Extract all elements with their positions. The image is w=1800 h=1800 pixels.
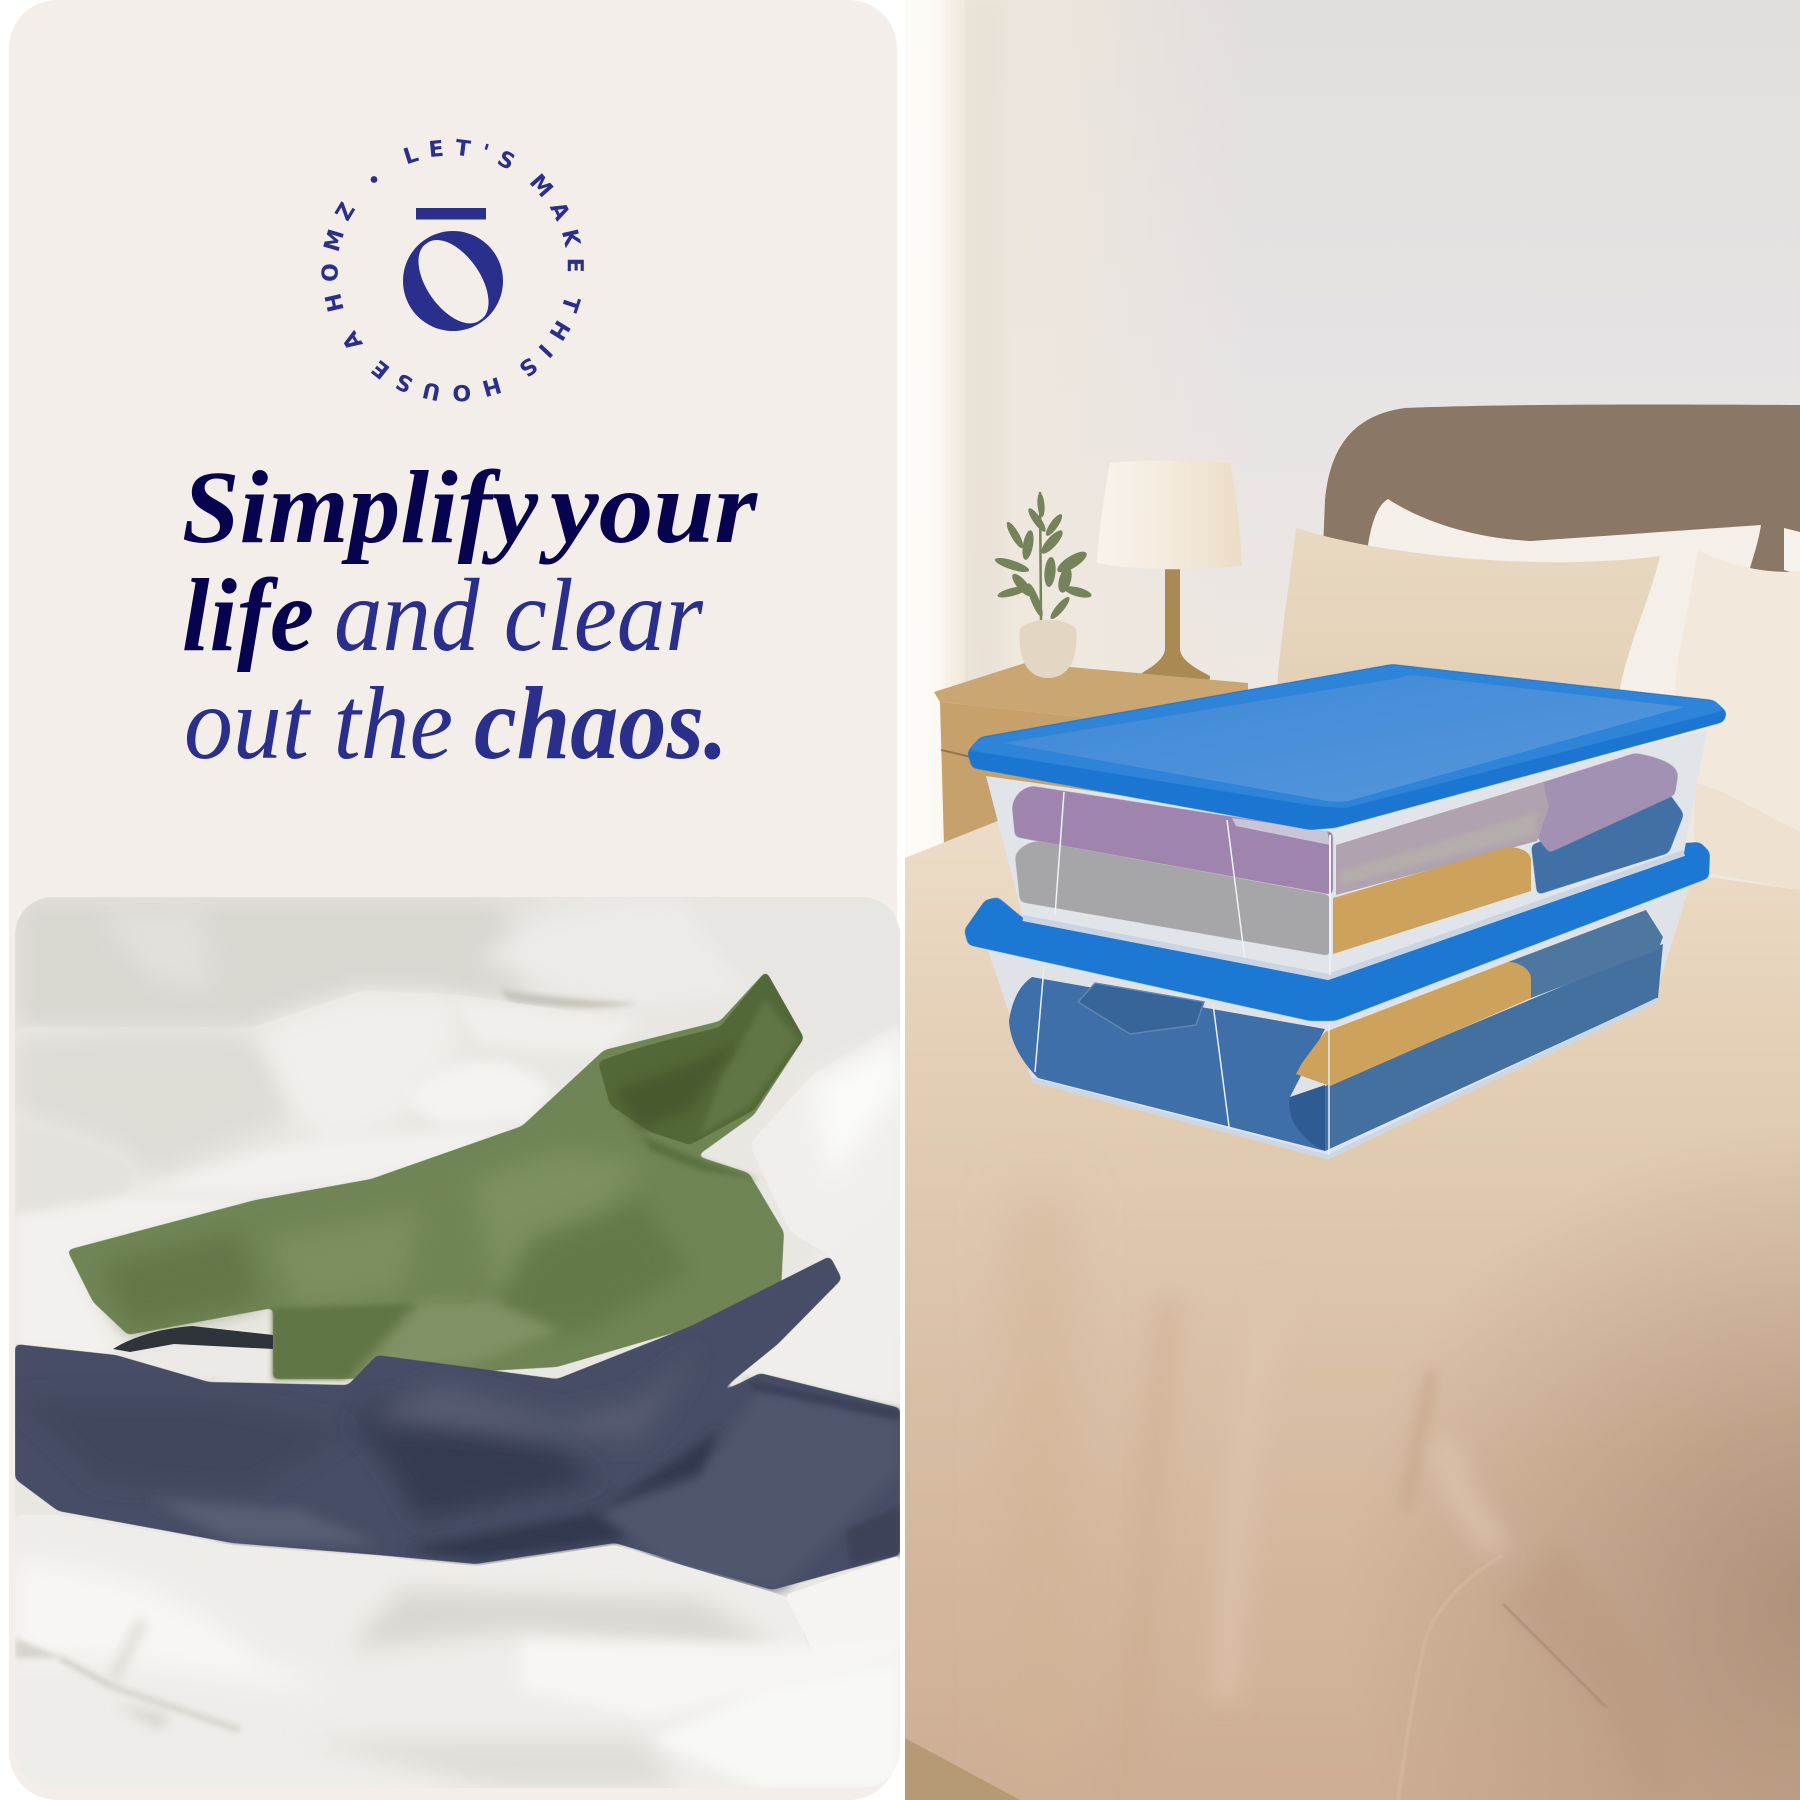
headline line 3: chaos. bbox=[474, 666, 728, 781]
far right white pillow edge bbox=[1784, 528, 1800, 575]
lamp bbox=[1097, 461, 1242, 688]
navy trousers bbox=[15, 1256, 900, 1590]
white duvet foreground bbox=[15, 1515, 900, 1788]
photo: messy bed with clothes bbox=[15, 897, 900, 1788]
potted plant bbox=[993, 492, 1093, 678]
front beige pillow bbox=[1276, 528, 1660, 700]
upper box body bbox=[986, 730, 1707, 977]
headline line 2: life bbox=[182, 558, 314, 673]
upper box yellow sweater bbox=[1333, 847, 1531, 954]
upper box purple sweater bbox=[1012, 786, 1333, 895]
bedroom wall bbox=[1038, 0, 1800, 890]
upper box light mauve sweater bbox=[1336, 782, 1549, 895]
logo O mark bbox=[403, 231, 503, 331]
headline line 1 bbox=[182, 450, 759, 565]
upper storage box bbox=[967, 664, 1727, 977]
rumpled top pillows bbox=[15, 897, 630, 1026]
back white pillow bbox=[1368, 499, 1761, 640]
logo separator dot bbox=[371, 176, 377, 183]
lower box clear plastic highlights bbox=[1032, 967, 1658, 1157]
upper box gray sweater bbox=[1015, 841, 1330, 956]
floor corner bbox=[905, 1738, 1020, 1800]
lower box jeans bbox=[1009, 977, 1325, 1151]
lower storage box bbox=[964, 842, 1710, 1157]
right-hand white pillow bbox=[752, 1028, 900, 1397]
headline line 3: out the bbox=[184, 666, 453, 781]
white divider strip between photos bbox=[900, 0, 905, 1800]
lid side band bbox=[967, 664, 1727, 830]
lower box upper-right denim bbox=[1508, 910, 1663, 998]
lower box body bbox=[986, 885, 1690, 1157]
upper box clear plastic highlights bbox=[1023, 792, 1684, 977]
black strap bbox=[113, 1326, 273, 1352]
upper box blue garment bbox=[1531, 793, 1684, 895]
lower box right-side jeans bbox=[1325, 944, 1663, 1151]
headline line 1: Simplify bbox=[182, 450, 539, 565]
left panel background bbox=[9, 0, 897, 1800]
white duvet folds bbox=[20, 991, 616, 1191]
right cream pillow bbox=[1676, 550, 1800, 696]
upper box mauve folded sweater bbox=[1537, 753, 1678, 853]
photo: tidy bedroom with storage boxes bbox=[905, 0, 1800, 1800]
logo badge bbox=[321, 138, 584, 402]
headline line 3 bbox=[184, 666, 728, 781]
upper box lid bbox=[967, 664, 1727, 830]
duvet bbox=[905, 820, 1800, 1800]
lid recessed centre bbox=[1003, 675, 1684, 802]
curtain bbox=[905, 0, 967, 860]
lid top rim bbox=[967, 665, 1726, 808]
headline line 2 bbox=[182, 558, 703, 673]
lower box lid bbox=[964, 842, 1710, 1021]
jeans back pocket bbox=[1078, 983, 1204, 1034]
logo circular slogan text: LET'S MAKE THIS HOUSE A HOMZ bbox=[321, 138, 584, 402]
headline bbox=[182, 450, 759, 781]
white sheet under the shirt bbox=[19, 1198, 220, 1353]
bed mattress edge right bbox=[1693, 782, 1800, 890]
logo macron bar bbox=[416, 208, 486, 220]
nightstand bbox=[934, 663, 1250, 845]
headline line 1: your bbox=[538, 450, 759, 565]
lower box yellow garment bbox=[1296, 962, 1531, 1086]
headline line 2: and clear bbox=[334, 558, 703, 673]
headboard bbox=[1324, 404, 1800, 572]
green t-shirt bbox=[67, 971, 804, 1379]
